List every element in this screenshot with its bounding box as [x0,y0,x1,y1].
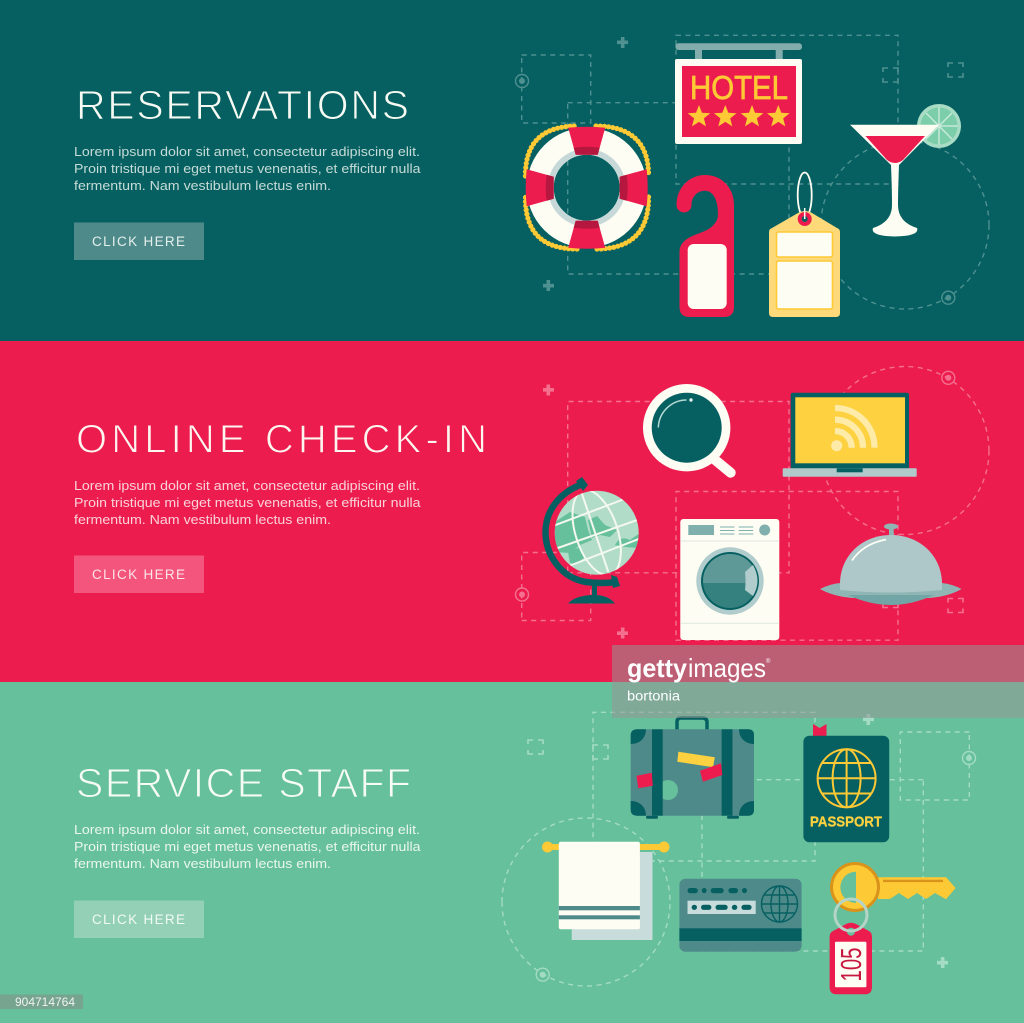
id strip: 904714764 [15,995,75,1009]
text block: check-in body [74,479,420,527]
text block: check-in body: Proin tristique mi eget metus venenatis, et efficitur nulla [74,496,420,510]
icon: food cloche [820,524,962,605]
id strip [0,994,83,1009]
watermark bar: getty [627,653,688,683]
icon: cocktail [850,104,961,236]
heading: online check-in: ONLINE CHECK-IN [76,418,487,462]
icon: hotel sign: HOTEL [690,69,788,106]
button: click here [74,900,204,938]
button: click here: CLICK HERE [92,567,185,582]
heading: service staff: SERVICE STAFF [76,760,411,806]
icon: key [832,864,956,910]
text block: service body: Lorem ipsum dolor sit amet, consectetur adipiscing elit. [74,823,420,837]
icon: door hanger [676,175,734,317]
panel: service staff [0,682,1024,1023]
icon: key fob 105 [830,899,872,994]
icon: key fob 105: 105 [836,948,868,982]
icon: suitcase [631,718,754,819]
icon: credit card [679,879,802,952]
text block: reservations body [74,145,420,193]
text block: check-in body: Lorem ipsum dolor sit amet, consectetur adipiscing elit. [74,479,420,493]
icon: laptop [783,393,917,477]
icon: hotel sign [675,43,802,144]
watermark bar [612,645,1024,718]
button: click here [74,556,204,593]
panel: online check-in [0,341,1024,682]
text block: service body [74,823,420,871]
text block: service body: fermentum. Nam vestibulum lectus enim. [74,857,331,871]
text block: check-in body: fermentum. Nam vestibulum lectus enim. [74,513,331,527]
button: click here: CLICK HERE [92,912,185,927]
icon: luggage tag [769,172,840,317]
icon: life ring [525,126,649,249]
text block: service body: Proin tristique mi eget metus venenatis, et efficitur nulla [74,840,420,854]
button: click here [74,222,204,260]
button: click here: CLICK HERE [92,234,185,249]
text block: reservations body: fermentum. Nam vestibulum lectus enim. [74,179,331,193]
heading: reservations: RESERVATIONS [76,82,409,128]
panel: reservations [0,0,1024,341]
watermark bar: images [688,653,766,683]
icon: passport: PASSPORT [810,814,882,831]
icon: globe [546,477,640,604]
watermark bar: bortonia [627,688,681,704]
icon: magnifier [643,384,731,473]
icon: washing machine [680,519,779,640]
text block: reservations body: Proin tristique mi eget metus venenatis, et efficitur nulla [74,162,420,176]
icon: towel on rail [542,842,670,940]
watermark bar: ® [766,658,771,665]
text block: reservations body: Lorem ipsum dolor sit amet, consectetur adipiscing elit. [74,145,420,159]
icon: passport [803,724,889,842]
